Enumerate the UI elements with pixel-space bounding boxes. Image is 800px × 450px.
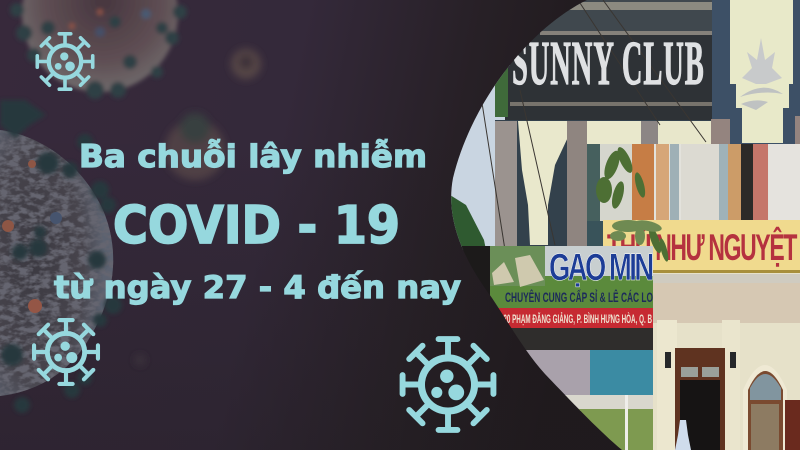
photo: Sunny Club: SUNNY CLUB [512, 30, 704, 98]
virus illustration: top left [10, 0, 187, 99]
photo: shuttered windows [587, 144, 800, 221]
photo: Gạo Minh shop: C: 20 PHẠM ĐĂNG GIẢNG, P. BÌNH HƯNG HÒA, Q. B [495, 313, 652, 326]
icon: virus top left [37, 34, 93, 89]
icon: virus bottom right [403, 339, 493, 430]
virus illustration: small blurred particles [135, 49, 261, 365]
photo: blue facade with emblem [711, 0, 800, 145]
heading line 3: từ ngày 27 - 4 đến nay [54, 270, 461, 306]
photo: Gạo Minh shop [462, 246, 654, 450]
heading line 2: COVID - 19 [113, 196, 400, 256]
photo: Gạo Minh shop: GẠO MIN [549, 247, 654, 289]
photo: overhanging leaves [596, 145, 670, 262]
photo: Như Nguyệt sign: THỦ NHƯ NGUYỆT [607, 225, 797, 268]
photo: Gạo Minh shop: CHUYÊN CUNG CẤP SỈ & LÊ CÁC LO [505, 288, 653, 305]
title [54, 139, 461, 306]
photo: villa entrance [653, 273, 800, 450]
photo collage [440, 0, 800, 450]
heading line 1: Ba chuỗi lây nhiễm [79, 139, 427, 175]
icon: virus bottom left [34, 320, 98, 384]
photo: Sunny Club [440, 0, 715, 250]
virus illustration: left large [0, 100, 122, 413]
